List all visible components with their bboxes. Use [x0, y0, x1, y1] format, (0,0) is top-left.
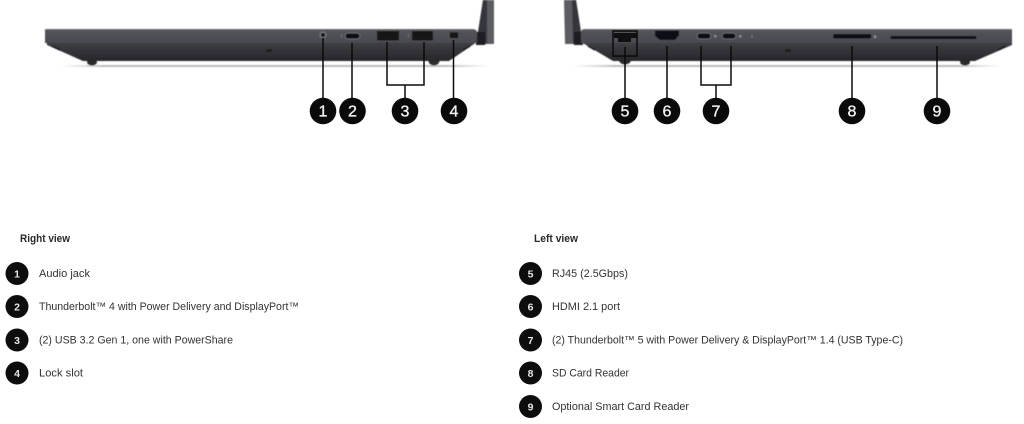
- legend item 2: Thunderbolt™ 4 with Power Delivery and DisplayPort™: [39, 301, 299, 313]
- legend item 8: [519, 362, 629, 384]
- legend item 1: Audio jack: [39, 268, 91, 280]
- legend item 7: (2) Thunderbolt™ 5 with Power Delivery & DisplayPort™ 1.4 (USB Type-C): [552, 334, 903, 346]
- legend item 9: [519, 395, 689, 418]
- callout 2: 2: [348, 104, 357, 120]
- callout 3: [387, 42, 424, 124]
- callout 9: 9: [933, 104, 942, 120]
- legend item 1: [6, 262, 91, 285]
- legend item 3: (2) USB 3.2 Gen 1, one with PowerShare: [39, 334, 233, 346]
- legend item 6: [519, 295, 620, 318]
- legend item 1: 1: [14, 268, 20, 280]
- callout 5: 5: [621, 104, 630, 120]
- panel: left view legend: [519, 233, 903, 418]
- callout 7: 7: [712, 104, 721, 120]
- legend item 8: SD Card Reader: [552, 368, 629, 380]
- callout 1: [310, 38, 336, 124]
- callout 8: [839, 46, 865, 124]
- legend item 5: [519, 262, 628, 285]
- callout 4: 4: [450, 104, 459, 120]
- legend item 3: [6, 328, 233, 352]
- callout 7: [701, 46, 731, 124]
- right side laptop view: [45, 0, 494, 67]
- legend item 7: 7: [528, 335, 534, 347]
- legend item 5: RJ45 (2.5Gbps): [552, 268, 628, 280]
- callout 3: 3: [401, 104, 410, 120]
- legend item 7: [519, 328, 903, 352]
- left side laptop view: [564, 0, 1012, 67]
- legend item 2: [6, 295, 299, 318]
- heading: left view: Left view: [534, 233, 579, 245]
- callout 8: 8: [848, 104, 857, 120]
- callout 6: [654, 46, 680, 124]
- legend item 4: 4: [14, 368, 20, 380]
- legend item 3: 3: [14, 335, 20, 347]
- callout 2: [339, 43, 366, 124]
- callout 4: [441, 40, 467, 124]
- legend item 5: 5: [528, 268, 534, 280]
- legend item 8: 8: [528, 368, 534, 380]
- legend item 4: [6, 362, 83, 384]
- legend item 6: HDMI 2.1 port: [552, 301, 620, 313]
- callout 6: 6: [663, 104, 672, 120]
- callout 1: 1: [319, 104, 328, 120]
- legend item 9: 9: [528, 401, 534, 413]
- heading: right view: Right view: [20, 233, 71, 245]
- legend item 2: 2: [14, 301, 20, 313]
- panel: right view legend: [6, 233, 299, 384]
- legend item 4: Lock slot: [39, 368, 83, 380]
- callout 9: [924, 46, 950, 124]
- legend item 9: Optional Smart Card Reader: [552, 401, 689, 413]
- callout 5: [612, 31, 638, 124]
- legend item 6: 6: [528, 301, 534, 313]
